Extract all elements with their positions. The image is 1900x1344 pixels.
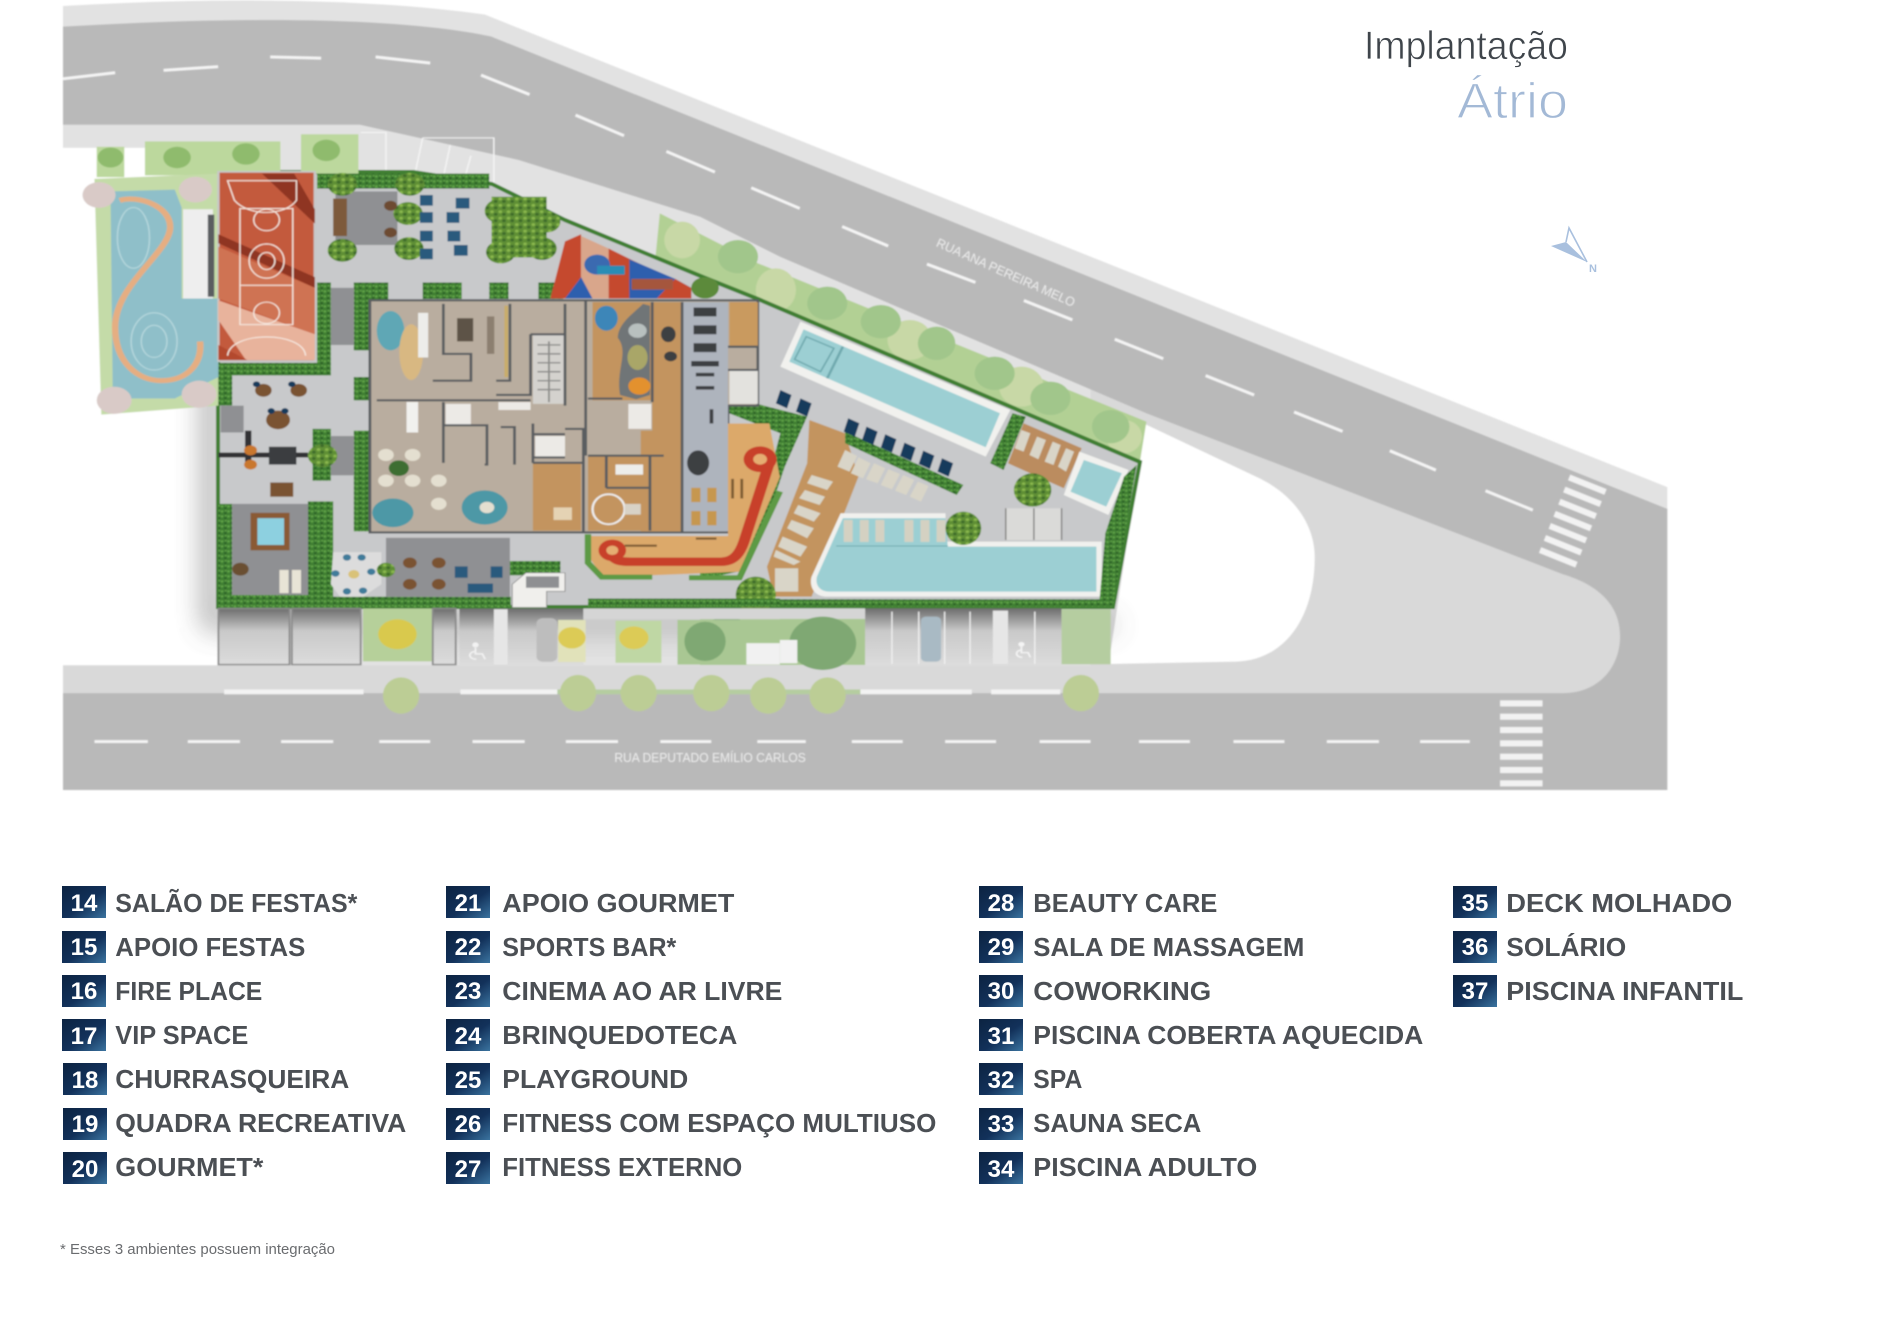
tower footprint <box>370 300 758 532</box>
legend item 30 <box>979 975 1211 1007</box>
legend item 33: SAUNA SECA <box>1033 1108 1202 1138</box>
interior walls <box>377 300 758 532</box>
legend item 17: VIP SPACE <box>115 1020 248 1050</box>
legend item 31: 31 <box>988 1023 1014 1050</box>
south hedge <box>700 599 1113 607</box>
legend item 30: COWORKING <box>1033 976 1211 1006</box>
pools and decks <box>700 322 1137 670</box>
legend item 14: 14 <box>71 890 98 917</box>
legend item 32: SPA <box>1033 1064 1083 1094</box>
navy loungers <box>776 390 953 477</box>
site plan <box>63 0 1667 790</box>
east hedge <box>1100 465 1137 606</box>
north garden trees <box>485 197 560 264</box>
icon: north arrow: N <box>1589 263 1597 275</box>
legend item 24: 24 <box>455 1023 482 1050</box>
garage access <box>218 609 456 665</box>
sunbeds <box>279 570 301 593</box>
legend item 16: FIRE PLACE <box>115 976 262 1006</box>
beige sunbeds <box>774 450 929 592</box>
legend item 37: PISCINA INFANTIL <box>1506 976 1743 1006</box>
icon: north arrow <box>1551 228 1597 275</box>
stair core <box>537 341 560 402</box>
legend column 3 <box>979 886 1424 1184</box>
legend item 36 <box>1453 931 1626 963</box>
legend item 25: PLAYGROUND <box>502 1064 688 1094</box>
lower parking area <box>865 608 1111 665</box>
legend item 22 <box>446 931 677 963</box>
brand name: Átrio: Átrio <box>1457 73 1568 129</box>
palms <box>736 473 1051 613</box>
street planter with trees <box>700 608 865 670</box>
legend column 1 <box>62 886 407 1184</box>
legend item 20 <box>63 1152 264 1184</box>
street name: Rua Deputado Emílio Carlos: RUA DEPUTADO EMÍLIO CARLOS <box>614 750 806 765</box>
legend item 21: 21 <box>455 890 481 917</box>
kids' play area <box>550 234 719 299</box>
legend item 26: FITNESS COM ESPAÇO MULTIUSO <box>502 1108 936 1138</box>
legend item 32: 32 <box>988 1067 1014 1094</box>
sun deck <box>1008 423 1082 488</box>
terrace shadow <box>205 340 1120 628</box>
lawn along Rua Ana Pereira Melo <box>655 213 1146 463</box>
legend item 18: 18 <box>72 1067 98 1094</box>
stairs <box>512 573 565 607</box>
legend item 18: CHURRASQUEIRA <box>115 1064 350 1094</box>
legend item 29: SALA DE MASSAGEM <box>1033 932 1304 962</box>
legend item 21: APOIO GOURMET <box>502 888 734 918</box>
north lounge: trees, tables and blue chairs <box>328 173 470 262</box>
legend item 16: 16 <box>71 978 97 1005</box>
legend item 14: SALÃO DE FESTAS* <box>115 888 358 918</box>
white service cores <box>407 334 651 475</box>
hedge beside fitness <box>700 397 807 580</box>
legend item 15: 15 <box>71 934 97 961</box>
amenities west of the tower and ground level <box>82 132 780 665</box>
legend item 37: 37 <box>1462 978 1488 1005</box>
legend item 19: 19 <box>72 1111 98 1138</box>
legend column 2 <box>446 886 936 1184</box>
spa room furniture <box>554 465 643 524</box>
legend item 26: 26 <box>455 1111 481 1138</box>
legend item 36: SOLÁRIO <box>1506 932 1626 962</box>
legend item 33: 33 <box>988 1111 1014 1138</box>
terrace floor <box>218 172 1140 607</box>
legend item 20: GOURMET* <box>115 1152 264 1182</box>
legend item 19: QUADRA RECREATIVA <box>115 1108 407 1138</box>
legend item 34: PISCINA ADULTO <box>1033 1152 1257 1182</box>
legend item 29: 29 <box>988 934 1014 961</box>
legend item 23: 23 <box>455 978 481 1005</box>
legend item 34: 34 <box>988 1156 1015 1183</box>
title: Implantação: Implantação <box>1364 24 1568 68</box>
children's pool <box>1064 452 1129 515</box>
legend item 31: PISCINA COBERTA AQUECIDA <box>1033 1020 1424 1050</box>
legend item 25: 25 <box>455 1067 481 1094</box>
legend item 35: 35 <box>1462 890 1488 917</box>
legend item 27: FITNESS EXTERNO <box>502 1152 742 1182</box>
street trees <box>224 675 1099 714</box>
wooden deck <box>767 420 858 597</box>
legend item 30: 30 <box>988 978 1014 1005</box>
hedges <box>218 174 780 607</box>
planter hedge <box>845 432 963 495</box>
north lawns <box>97 132 494 182</box>
legend item 22: 22 <box>455 934 481 961</box>
legend item 20: 20 <box>72 1156 98 1183</box>
round lounge <box>331 552 395 597</box>
legend item 36: 36 <box>1462 934 1488 961</box>
legend item 17: 17 <box>71 1023 97 1050</box>
pergola <box>1006 508 1062 540</box>
legend item 28: BEAUTY CARE <box>1033 888 1217 918</box>
room finishes <box>533 302 758 531</box>
legend item 23: CINEMA AO AR LIVRE <box>502 976 782 1006</box>
parking and street planters <box>459 609 780 665</box>
legend item 22: SPORTS BAR* <box>502 932 677 962</box>
adult pool <box>811 513 1102 597</box>
legend item 15: APOIO FESTAS <box>115 932 305 962</box>
legend item 27: 27 <box>455 1156 481 1183</box>
legend item 32 <box>979 1063 1083 1095</box>
legend column 4 <box>1453 886 1743 1007</box>
street name: Rua Ana Pereira Melo: RUA ANA PEREIRA MELO <box>934 235 1078 310</box>
south terrace tables <box>403 557 503 593</box>
legend item 24: BRINQUEDOTECA <box>502 1020 738 1050</box>
outdoor playground pool area <box>82 174 218 415</box>
legend item 28: 28 <box>988 890 1014 917</box>
sports court <box>218 172 315 361</box>
lap pool <box>780 322 1010 457</box>
fitness outdoor track <box>588 424 780 578</box>
spa tub <box>251 513 290 550</box>
legend item 17 <box>62 1019 248 1051</box>
south-west barbecue and tables <box>218 381 337 576</box>
streets <box>63 0 1667 790</box>
legend item 16 <box>62 975 262 1007</box>
grey paving <box>221 191 510 597</box>
legend item 35: DECK MOLHADO <box>1506 888 1732 918</box>
fitness equipment <box>661 307 719 525</box>
gourmet lounge: pool feature, island, tables <box>372 306 508 527</box>
footnote: * Esses 3 ambientes possuem integração <box>60 1241 335 1258</box>
